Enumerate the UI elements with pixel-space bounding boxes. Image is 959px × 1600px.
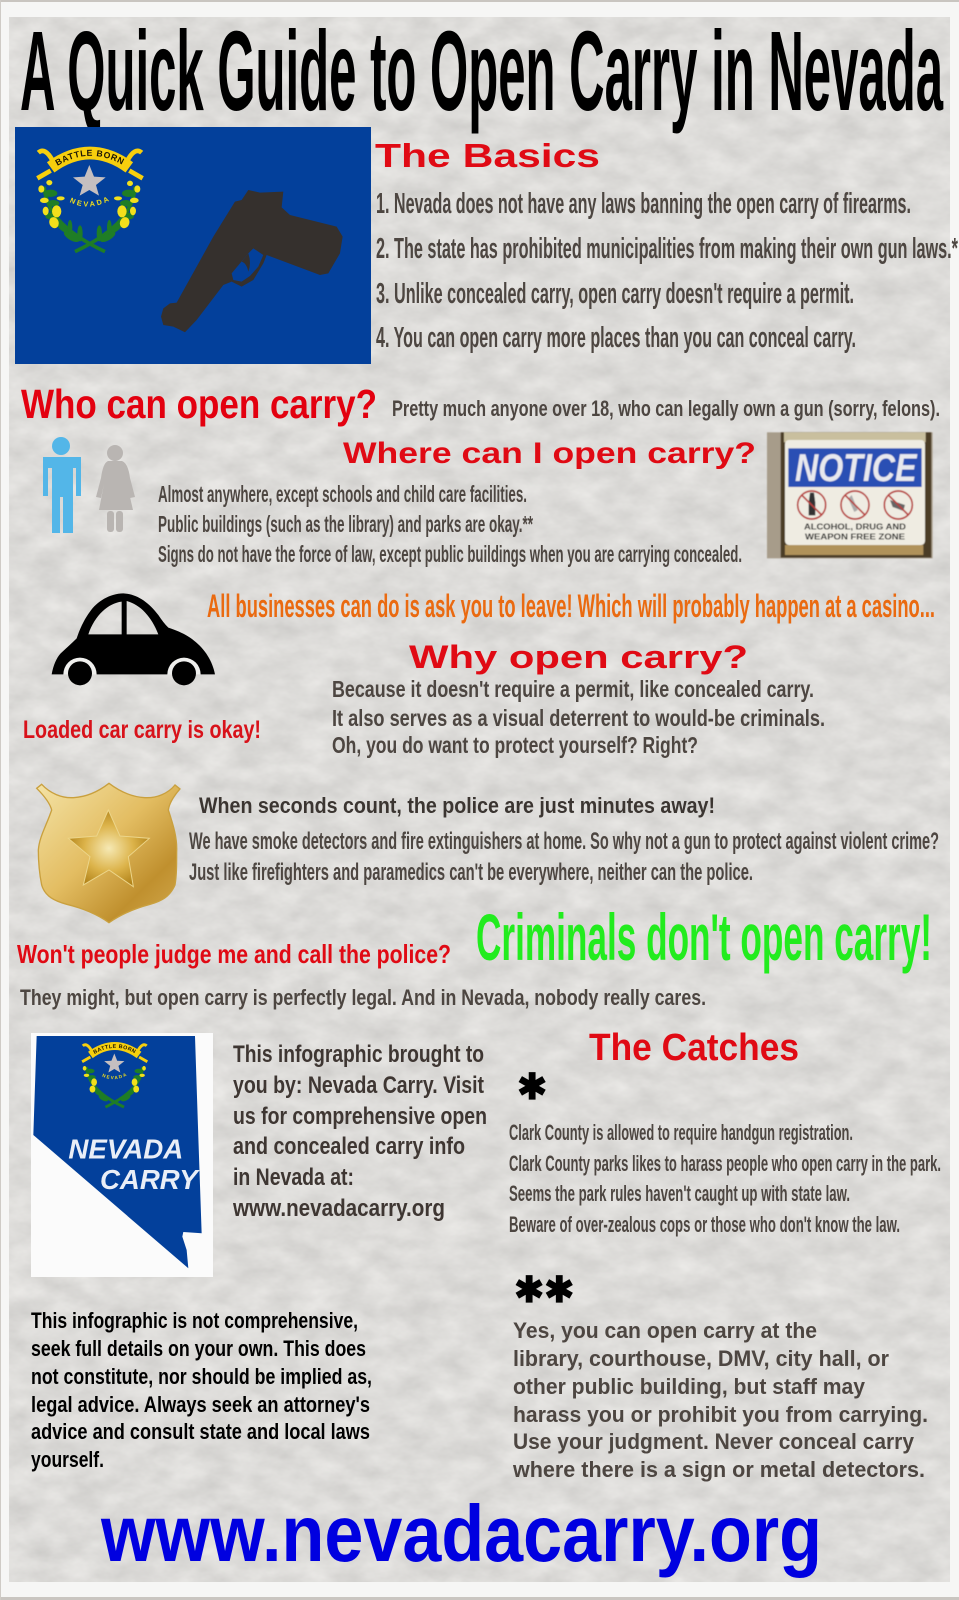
photo: notice sign: ALCOHOL, DRUG AND bbox=[804, 523, 906, 532]
text block: public buildings caveat: harass you or prohibit you from carrying. bbox=[513, 1402, 928, 1427]
text block: disclaimer: not constitute, nor should be implied as, bbox=[31, 1364, 372, 1389]
text block: brought to you by: www.nevadacarry.org bbox=[232, 1195, 445, 1222]
photo: notice sign bbox=[767, 432, 933, 558]
text block: disclaimer: seek full details on your own. This does bbox=[31, 1336, 366, 1361]
panel: nevada flag with gun bbox=[15, 127, 371, 364]
text block: public buildings caveat: other public building, but staff may bbox=[513, 1374, 866, 1399]
text block: disclaimer: legal advice. Always seek an attorney's bbox=[31, 1392, 370, 1417]
text block: why open carry: It also serves as a visual deterrent to would-be criminals. bbox=[332, 705, 825, 731]
heading: who can open carry: Who can open carry? bbox=[21, 381, 377, 427]
heading: why open carry: Why open carry? bbox=[409, 639, 748, 675]
text block: brought to you by: us for comprehensive open bbox=[233, 1103, 487, 1130]
text block: clark county bbox=[509, 1120, 941, 1237]
text block: disclaimer bbox=[31, 1308, 372, 1472]
text block: brought to you by: This infographic brought to bbox=[233, 1041, 484, 1068]
text block: public buildings caveat bbox=[512, 1318, 928, 1482]
icon: car bbox=[52, 593, 215, 685]
heading: the basics: The Basics bbox=[375, 137, 600, 174]
heading: won't people judge me: Won't people judge me and call the police? bbox=[17, 939, 451, 969]
icon: double asterisk: ✱✱ bbox=[514, 1270, 574, 1311]
text block: where can i open carry: Almost anywhere, except schools and child care facilities. bbox=[158, 481, 527, 507]
photo: notice sign: WEAPON FREE ZONE bbox=[805, 532, 906, 541]
icon: man and woman bbox=[43, 437, 135, 533]
text block: brought to you by: you by: Nevada Carry. Visit bbox=[233, 1072, 484, 1099]
icon: small state seal: BATTLE BORN bbox=[93, 1044, 136, 1054]
text block: disclaimer: yourself. bbox=[31, 1447, 104, 1472]
text block: disclaimer: advice and consult state and local laws bbox=[31, 1419, 370, 1444]
icon: pistol silhouette bbox=[161, 190, 343, 332]
icon: small state seal: NEVADA bbox=[102, 1073, 126, 1080]
text block: public buildings caveat: Yes, you can open carry at the bbox=[513, 1318, 817, 1343]
text block: why open carry: Oh, you do want to protect yourself? Right? bbox=[332, 732, 698, 758]
text block: public buildings caveat: library, courthouse, DMV, city hall, or bbox=[513, 1346, 889, 1371]
text block: police bbox=[189, 828, 939, 886]
callout: loaded car carry: Loaded car carry is okay! bbox=[23, 716, 261, 744]
text block: the basics list bbox=[376, 188, 958, 354]
heading: where can i open carry: Where can I open carry? bbox=[343, 437, 756, 470]
footer url: www.nevadacarry.org bbox=[100, 1489, 822, 1578]
icon: small state seal bbox=[82, 1042, 148, 1108]
text block: why open carry bbox=[332, 676, 825, 758]
text block: brought to you by: and concealed carry info bbox=[233, 1133, 465, 1160]
text block: where can i open carry bbox=[158, 481, 742, 567]
heading: when seconds count: When seconds count, the police are just minutes away! bbox=[199, 793, 715, 818]
logo: nevada carry state shape bbox=[31, 1033, 213, 1277]
logo: nevada carry state shape: CARRY bbox=[100, 1164, 200, 1195]
logo: nevada carry state shape: NEVADA bbox=[68, 1133, 183, 1164]
text block: public buildings caveat: Use your judgment. Never conceal carry bbox=[513, 1429, 915, 1454]
text block: disclaimer: This infographic is not comprehensive, bbox=[31, 1308, 358, 1333]
text block: where can i open carry: Public buildings (such as the library) and parks are okay.** bbox=[158, 511, 533, 537]
icon: state seal: BATTLE BORN bbox=[55, 150, 124, 166]
text block: brought to you by bbox=[232, 1041, 487, 1222]
icon: single asterisk: ✱ bbox=[517, 1067, 547, 1108]
photo: notice sign: NOTICE bbox=[795, 446, 918, 490]
icon: police badge bbox=[37, 783, 180, 923]
text block: public buildings caveat: where there is a sign or metal detectors. bbox=[512, 1457, 925, 1482]
icon: state seal: NEVADA bbox=[70, 197, 109, 207]
text block: brought to you by: in Nevada at: bbox=[233, 1164, 354, 1191]
text: judge answer: They might, but open carry is perfectly legal. And in Nevada, nobody really cares. bbox=[20, 985, 706, 1010]
text block: why open carry: Because it doesn't require a permit, like concealed carry. bbox=[332, 676, 814, 702]
icon: state seal bbox=[36, 146, 144, 254]
heading: the catches: The Catches bbox=[589, 1027, 799, 1069]
